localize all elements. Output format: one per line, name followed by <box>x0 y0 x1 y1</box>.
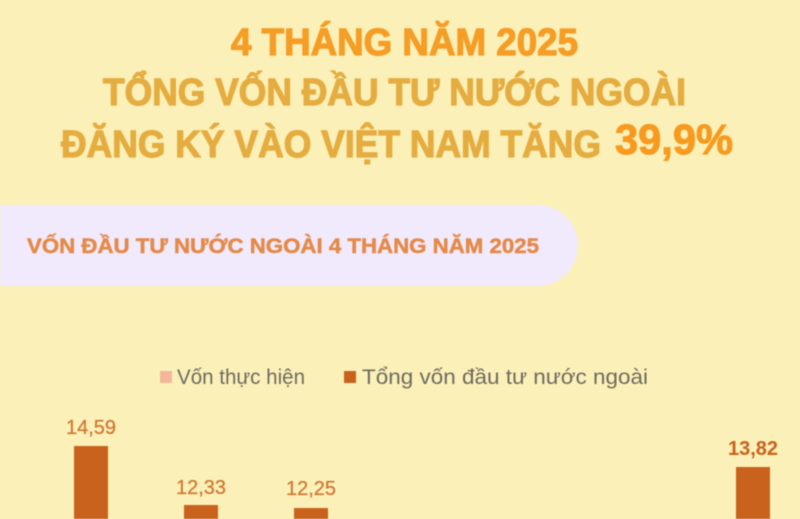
bar: 12,25: 12,25 <box>286 478 336 500</box>
title line: total foreign investment: TỔNG VỐN ĐẦU TƯ NƯỚC NGOÀI <box>103 69 686 114</box>
bar: 14,59 <box>66 417 116 519</box>
bar chart <box>66 417 778 519</box>
legend swatch: total foreign capital <box>344 371 356 383</box>
legend swatch: realised capital <box>160 371 172 383</box>
bar: 12,33: 12,33 <box>176 477 226 499</box>
chart legend <box>160 366 648 389</box>
bar: 13,82 <box>728 438 778 519</box>
legend label: realised capital: Vốn thực hiện <box>177 366 305 389</box>
bar: 12,25 <box>286 478 336 519</box>
bar: 12,33 <box>176 477 226 519</box>
banner heading: VỐN ĐẦU TƯ NƯỚC NGOÀI 4 THÁNG NĂM 2025 <box>27 234 539 258</box>
title <box>61 20 733 166</box>
title highlight: growth rate: 39,9% <box>615 116 733 164</box>
title line: period: 4 THÁNG NĂM 2025 <box>231 20 578 64</box>
section banner <box>0 205 578 286</box>
bar: 13,82: 13,82 <box>728 438 778 460</box>
title line: registered in Vietnam: ĐĂNG KÝ VÀO VIỆT NAM TĂNG <box>61 122 601 166</box>
bar: 14,59: 14,59 <box>66 417 116 439</box>
legend label: total foreign capital: Tổng vốn đầu tư nước ngoài <box>362 366 648 389</box>
